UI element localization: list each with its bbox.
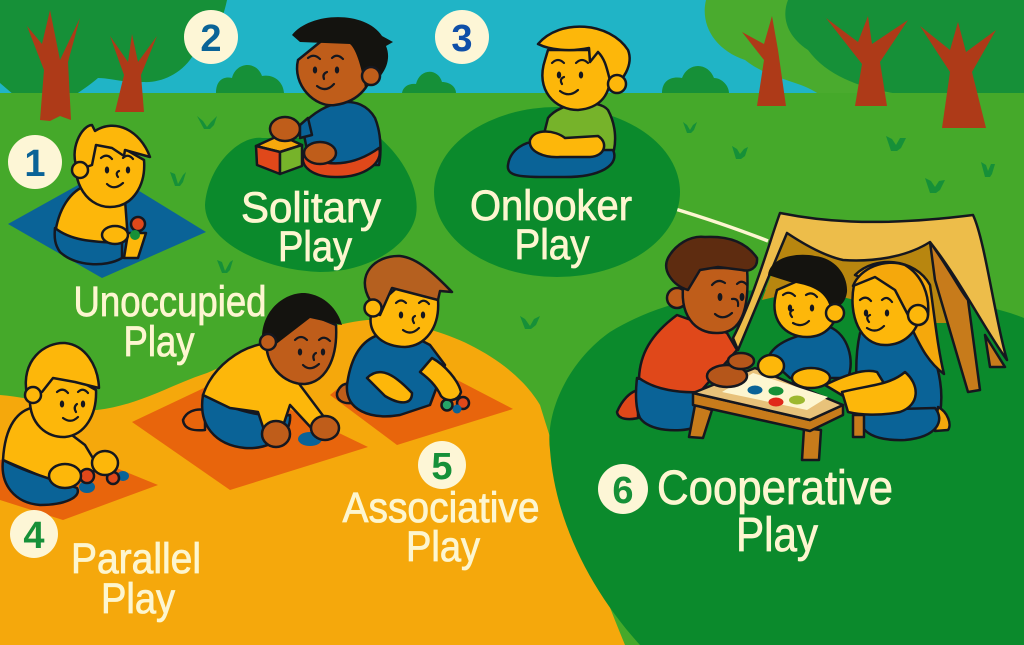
number 5 badge [418,441,466,489]
child 4: parallel play [3,343,129,505]
legs [508,142,614,177]
interior [762,233,948,323]
head [76,135,144,207]
side [693,393,843,431]
number 1 badge [8,135,62,189]
arm [530,132,604,157]
label: associative play line 2: Play [406,523,480,571]
child 1: unoccupied play [8,125,206,278]
number 4 badge [10,510,58,558]
grass tufts [170,116,995,329]
number 5 badge: 5 [431,446,453,488]
number 6 badge [598,464,648,514]
head [297,30,372,105]
legs [689,405,864,460]
body [302,102,380,165]
number 1 badge: 1 [24,143,46,185]
label: cooperative play: Cooperative [657,462,893,515]
label: parallel play line 2: Play [101,575,175,623]
game pieces [748,386,762,394]
child 3: onlooker play [508,27,630,177]
number 6 badge: 6 [612,470,634,512]
head [667,288,687,308]
child 5a: associative play [183,293,342,448]
toy in hand [124,233,146,258]
label: associative play: Associative [342,484,540,532]
number 2 badge [184,10,238,64]
blue mat [8,170,206,278]
tent [733,213,1007,392]
path: orange play area [0,320,625,645]
panel: solitary play ellipse [205,138,417,272]
panel: cooperative dark green area [549,289,1024,645]
hands on the table [707,353,916,415]
head [542,50,610,110]
beads and hands [79,481,95,493]
number 4 badge: 4 [23,515,45,557]
legs [636,378,697,430]
label: parallel play: Parallel [71,535,201,583]
panel: onlooker play ellipse [434,107,680,277]
number 2 badge: 2 [200,18,222,60]
block [256,135,302,174]
table [689,368,864,460]
child 6c: cooperative play hair and body [852,262,950,440]
label: onlooker play line 2: Play [514,221,590,269]
orange mats [0,345,513,520]
child 6a: cooperative play [617,237,757,430]
background: sky [0,0,1024,95]
child 6b: cooperative play [768,255,851,378]
hands [270,117,300,141]
back pole [985,335,1005,367]
shirt [540,103,615,150]
shoe [617,390,638,419]
child 5b: associative play [337,256,469,416]
label: cooperative play line 2: Play [736,509,818,562]
child body [55,185,128,245]
top [693,368,843,420]
canopy [733,213,1007,360]
label: solitary play: Solitary [241,184,381,232]
number 3 badge: 3 [451,18,473,60]
shirt [639,315,737,392]
label: unoccupied play line 2: Play [124,318,195,366]
label: solitary play line 2: Play [278,223,352,271]
label: onlooker play: Onlooker [470,182,632,230]
label: unoccupied play: Unoccupied [74,278,266,326]
trees [27,10,996,128]
background: treeline foliage [0,0,1024,95]
number 3 badge [435,10,489,64]
child 2: solitary play [256,17,393,177]
front pole [930,242,980,392]
path: white line to tent [672,208,768,241]
